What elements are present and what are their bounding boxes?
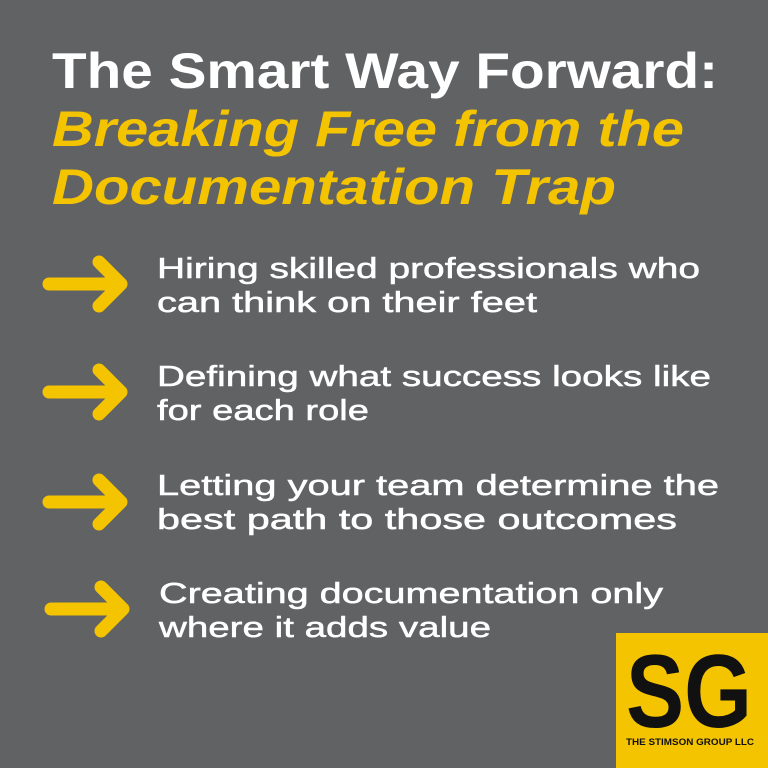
list item 4: Creating documentation only	[159, 578, 664, 610]
list item 3: Letting your team determine the	[157, 470, 719, 502]
list item 2: Defining what success looks like	[157, 361, 711, 393]
list item 1: can think on their feet	[157, 287, 537, 319]
list item 2: for each role	[157, 395, 369, 427]
title: Documentation Trap	[52, 159, 616, 215]
logo: THE STIMSON GROUP LLC	[626, 737, 755, 747]
list item 2	[49, 361, 711, 427]
title	[52, 43, 718, 215]
list item 3	[49, 470, 719, 536]
list item 3: best path to those outcomes	[157, 504, 677, 536]
list item 4: where it adds value	[158, 612, 491, 644]
icon: arrow 2	[49, 370, 121, 414]
title: The Smart Way Forward:	[52, 43, 718, 99]
list item 1: Hiring skilled professionals who	[157, 253, 700, 285]
icon: arrow 4	[51, 587, 123, 631]
list item 4	[51, 578, 664, 644]
title: Breaking Free from the	[52, 101, 684, 157]
icon: arrow 1	[49, 262, 121, 306]
icon: arrow 3	[49, 480, 121, 524]
list item 1	[49, 253, 700, 319]
